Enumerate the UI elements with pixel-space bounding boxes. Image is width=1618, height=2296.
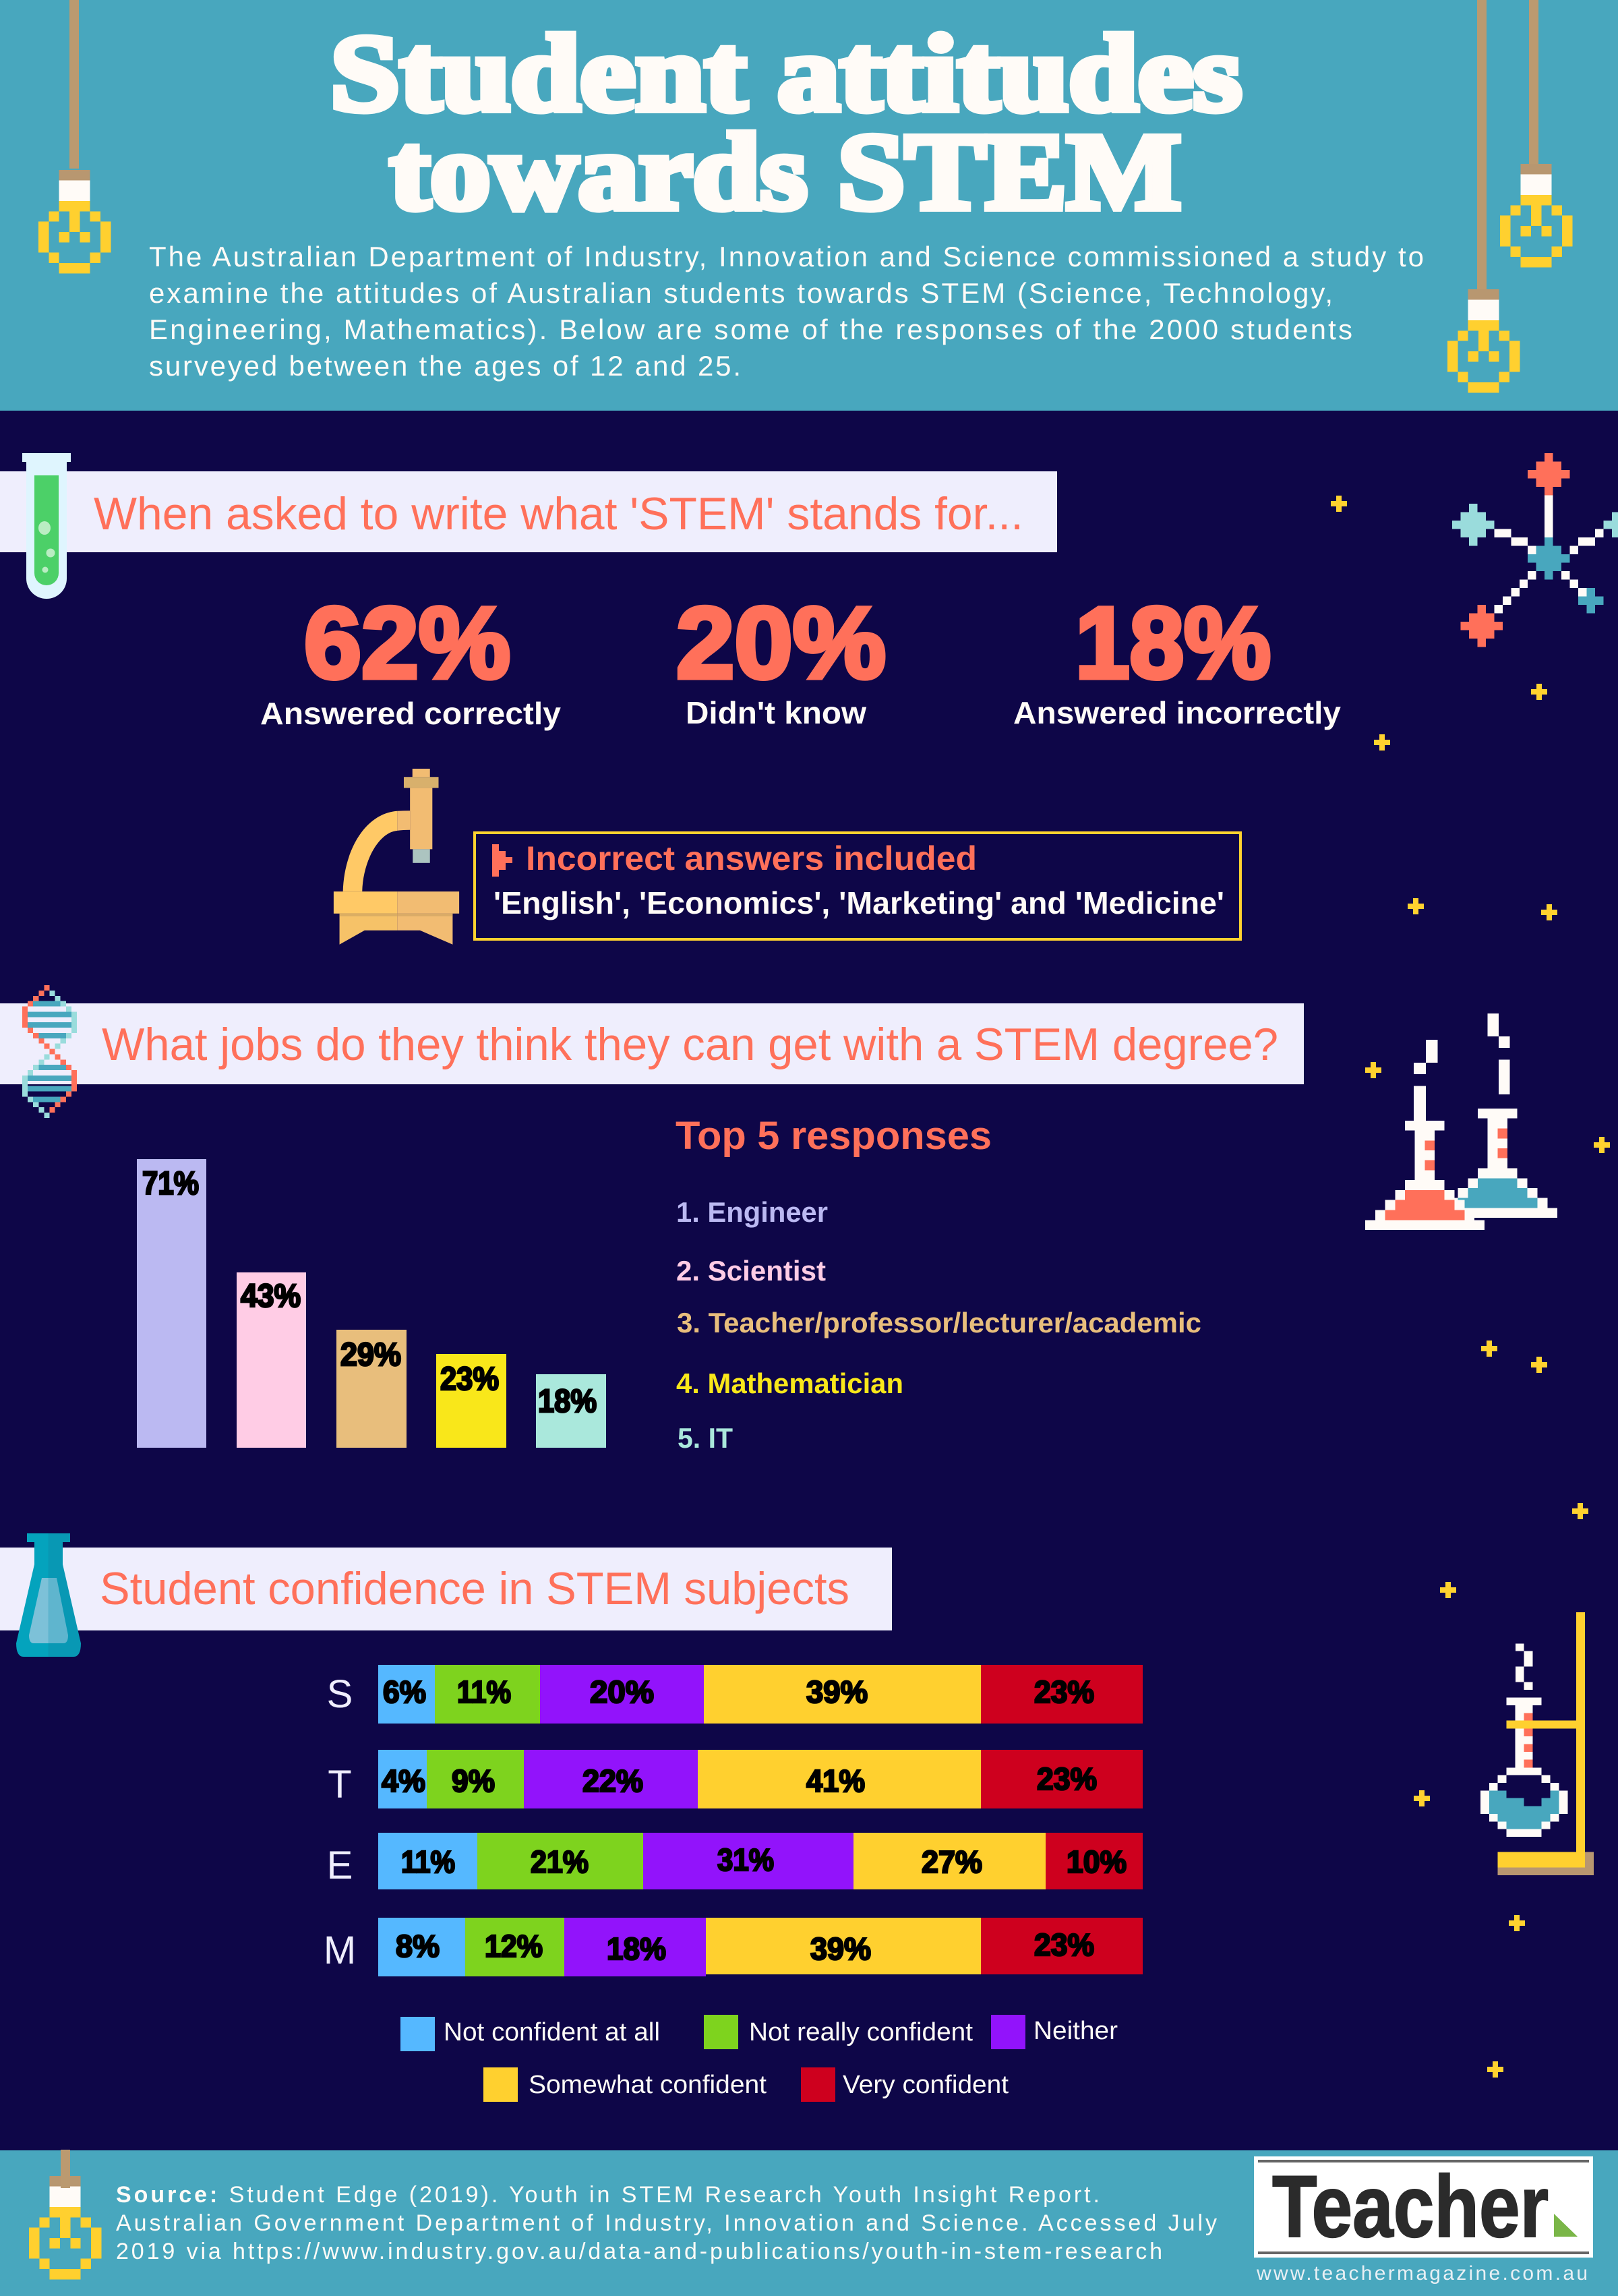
panel: header (0, 0, 1618, 411)
row M: 23% (1034, 1927, 1094, 1962)
header background (0, 0, 1618, 411)
section heading bar (0, 1548, 892, 1630)
bar: 29%: 29% (340, 1337, 401, 1373)
icon: molecule (1452, 453, 1618, 647)
row T (328, 1750, 1143, 1808)
icon: test tube (22, 453, 71, 599)
row E (327, 1833, 1143, 1889)
source text: Australian Government Department of Industry, Innovation and Science. Accessed July (116, 2210, 1217, 2236)
top 5 responses list: Top 5 responses (676, 1114, 992, 1158)
row T: 4% (382, 1763, 425, 1798)
row S: 11% (457, 1674, 511, 1709)
row T: 9% (452, 1763, 495, 1798)
panel: footer (0, 2150, 1618, 2296)
legend: Somewhat confident (529, 2071, 767, 2099)
section heading bar (0, 471, 1057, 552)
callout: incorrect answers (475, 833, 1240, 939)
bar: 29% (336, 1330, 407, 1448)
top 5 responses list: 4. Mathematician (676, 1367, 903, 1399)
row M (324, 1918, 1143, 1976)
icon: pixel flasks (1365, 1013, 1557, 1230)
intro text block: surveyed between the ages of 12 and 25. (149, 350, 741, 382)
section heading bar (0, 1003, 1304, 1084)
icon: pixel marker (492, 844, 512, 877)
row S: 6% (383, 1674, 426, 1709)
callout heading: Incorrect answers included (526, 840, 977, 877)
icon: microscope (334, 769, 459, 945)
stat: 62% answered correctly (260, 586, 561, 731)
intro text block: Engineering, Mathematics). Below are some of the responses of the 2000 students (149, 314, 1352, 345)
legend: Very confident (843, 2071, 1009, 2099)
top 5 responses list (676, 1114, 1201, 1454)
bar: 18% (536, 1374, 606, 1448)
stat: 62% answered correctly: Answered correctly (260, 696, 561, 731)
bar: 71%: 71% (142, 1166, 199, 1202)
legend: Neither (1033, 2017, 1118, 2045)
row M: M (324, 1929, 356, 1972)
panel: what STEM stands for (0, 453, 1618, 945)
icon: DNA helix (22, 985, 77, 1118)
row E: 27% (922, 1844, 982, 1879)
section heading bar: Student confidence in STEM subjects (100, 1563, 849, 1614)
row E: 10% (1067, 1844, 1127, 1879)
panel: jobs with a STEM degree (0, 985, 1557, 1454)
intro text block: examine the attitudes of Australian students towards STEM (Science, Technology, (149, 277, 1333, 309)
website URL: www.teachermagazine.com.au (1256, 2262, 1588, 2285)
bar chart: top 5 jobs (137, 1159, 606, 1448)
row M: 12% (485, 1929, 543, 1964)
legend: Not confident at all (444, 2018, 660, 2047)
icon: hanging bulb right lower (1447, 0, 1520, 392)
stacked bar chart (324, 1665, 1143, 1976)
intro text block (149, 241, 1424, 382)
icon: hanging bulb footer (29, 2150, 101, 2279)
row E: 31% (717, 1842, 774, 1877)
row S: 39% (806, 1674, 868, 1709)
row E: E (327, 1844, 353, 1887)
row T: 41% (806, 1763, 865, 1798)
row E: 21% (531, 1844, 589, 1879)
stat: 20% didn't know: Didn't know (686, 695, 866, 730)
bar: 23%: 23% (440, 1361, 499, 1397)
row S: 20% (590, 1674, 654, 1709)
title: Student attitudes (330, 13, 1242, 134)
row M: 8% (396, 1929, 440, 1964)
section heading bar: When asked to write what 'STEM' stands for... (94, 488, 1023, 539)
top 5 responses list: 2. Scientist (676, 1255, 826, 1287)
Teacher logo: Teacher (1272, 2157, 1549, 2256)
row M: 18% (607, 1931, 666, 1966)
row M: 39% (810, 1931, 871, 1966)
title: towards STEM (390, 112, 1181, 233)
row T: 23% (1037, 1761, 1097, 1796)
title (330, 13, 1242, 233)
bar: 23% (436, 1354, 506, 1448)
stat: 18% answered incorrectly (1013, 586, 1341, 730)
decorative stars (1331, 496, 1610, 2078)
top 5 responses list: 1. Engineer (676, 1196, 828, 1228)
bar: 43% (237, 1272, 306, 1448)
bar: 71% (137, 1159, 206, 1448)
stat: 18% answered incorrectly: Answered incorrectly (1013, 695, 1341, 730)
stat: 62% answered correctly: 62% (304, 586, 510, 699)
row S: S (327, 1672, 353, 1716)
top 5 responses list: 3. Teacher/professor/lecturer/academic (677, 1307, 1201, 1338)
legend: Not really confident (749, 2018, 973, 2047)
panel: student confidence (0, 1533, 1594, 2102)
source text: 2019 via https://www.industry.gov.au/data-and-publications/youth-in-stem-research (116, 2239, 1162, 2264)
callout body: 'English', 'Economics', 'Marketing' and 'Medicine' (493, 885, 1224, 920)
bar: 18%: 18% (538, 1384, 597, 1419)
icon: hanging bulb right upper (1500, 0, 1572, 267)
source text: Source: Student Edge (2019). Youth in STEM Research Youth Insight Report. (116, 2182, 1100, 2208)
row S: 23% (1034, 1674, 1094, 1709)
stat: 18% answered incorrectly: 18% (1075, 586, 1271, 699)
bar: 43%: 43% (241, 1278, 301, 1314)
icon: retort stand with flask (1480, 1612, 1594, 1875)
stat: 20% didn't know: 20% (676, 586, 886, 699)
row T: 22% (582, 1763, 643, 1798)
row T: T (328, 1763, 352, 1806)
row E: 11% (401, 1844, 455, 1879)
section heading bar: What jobs do they think they can get with a STEM degree? (102, 1019, 1278, 1070)
legend (400, 2015, 1118, 2102)
icon: hanging bulb left (38, 0, 111, 273)
source text (116, 2182, 1217, 2264)
icon: conical flask (16, 1533, 81, 1657)
row S (327, 1665, 1143, 1724)
top 5 responses list: 5. IT (678, 1422, 733, 1454)
intro text block: The Australian Department of Industry, Innovation and Science commissioned a study to (149, 241, 1424, 272)
footer background (0, 2150, 1618, 2296)
